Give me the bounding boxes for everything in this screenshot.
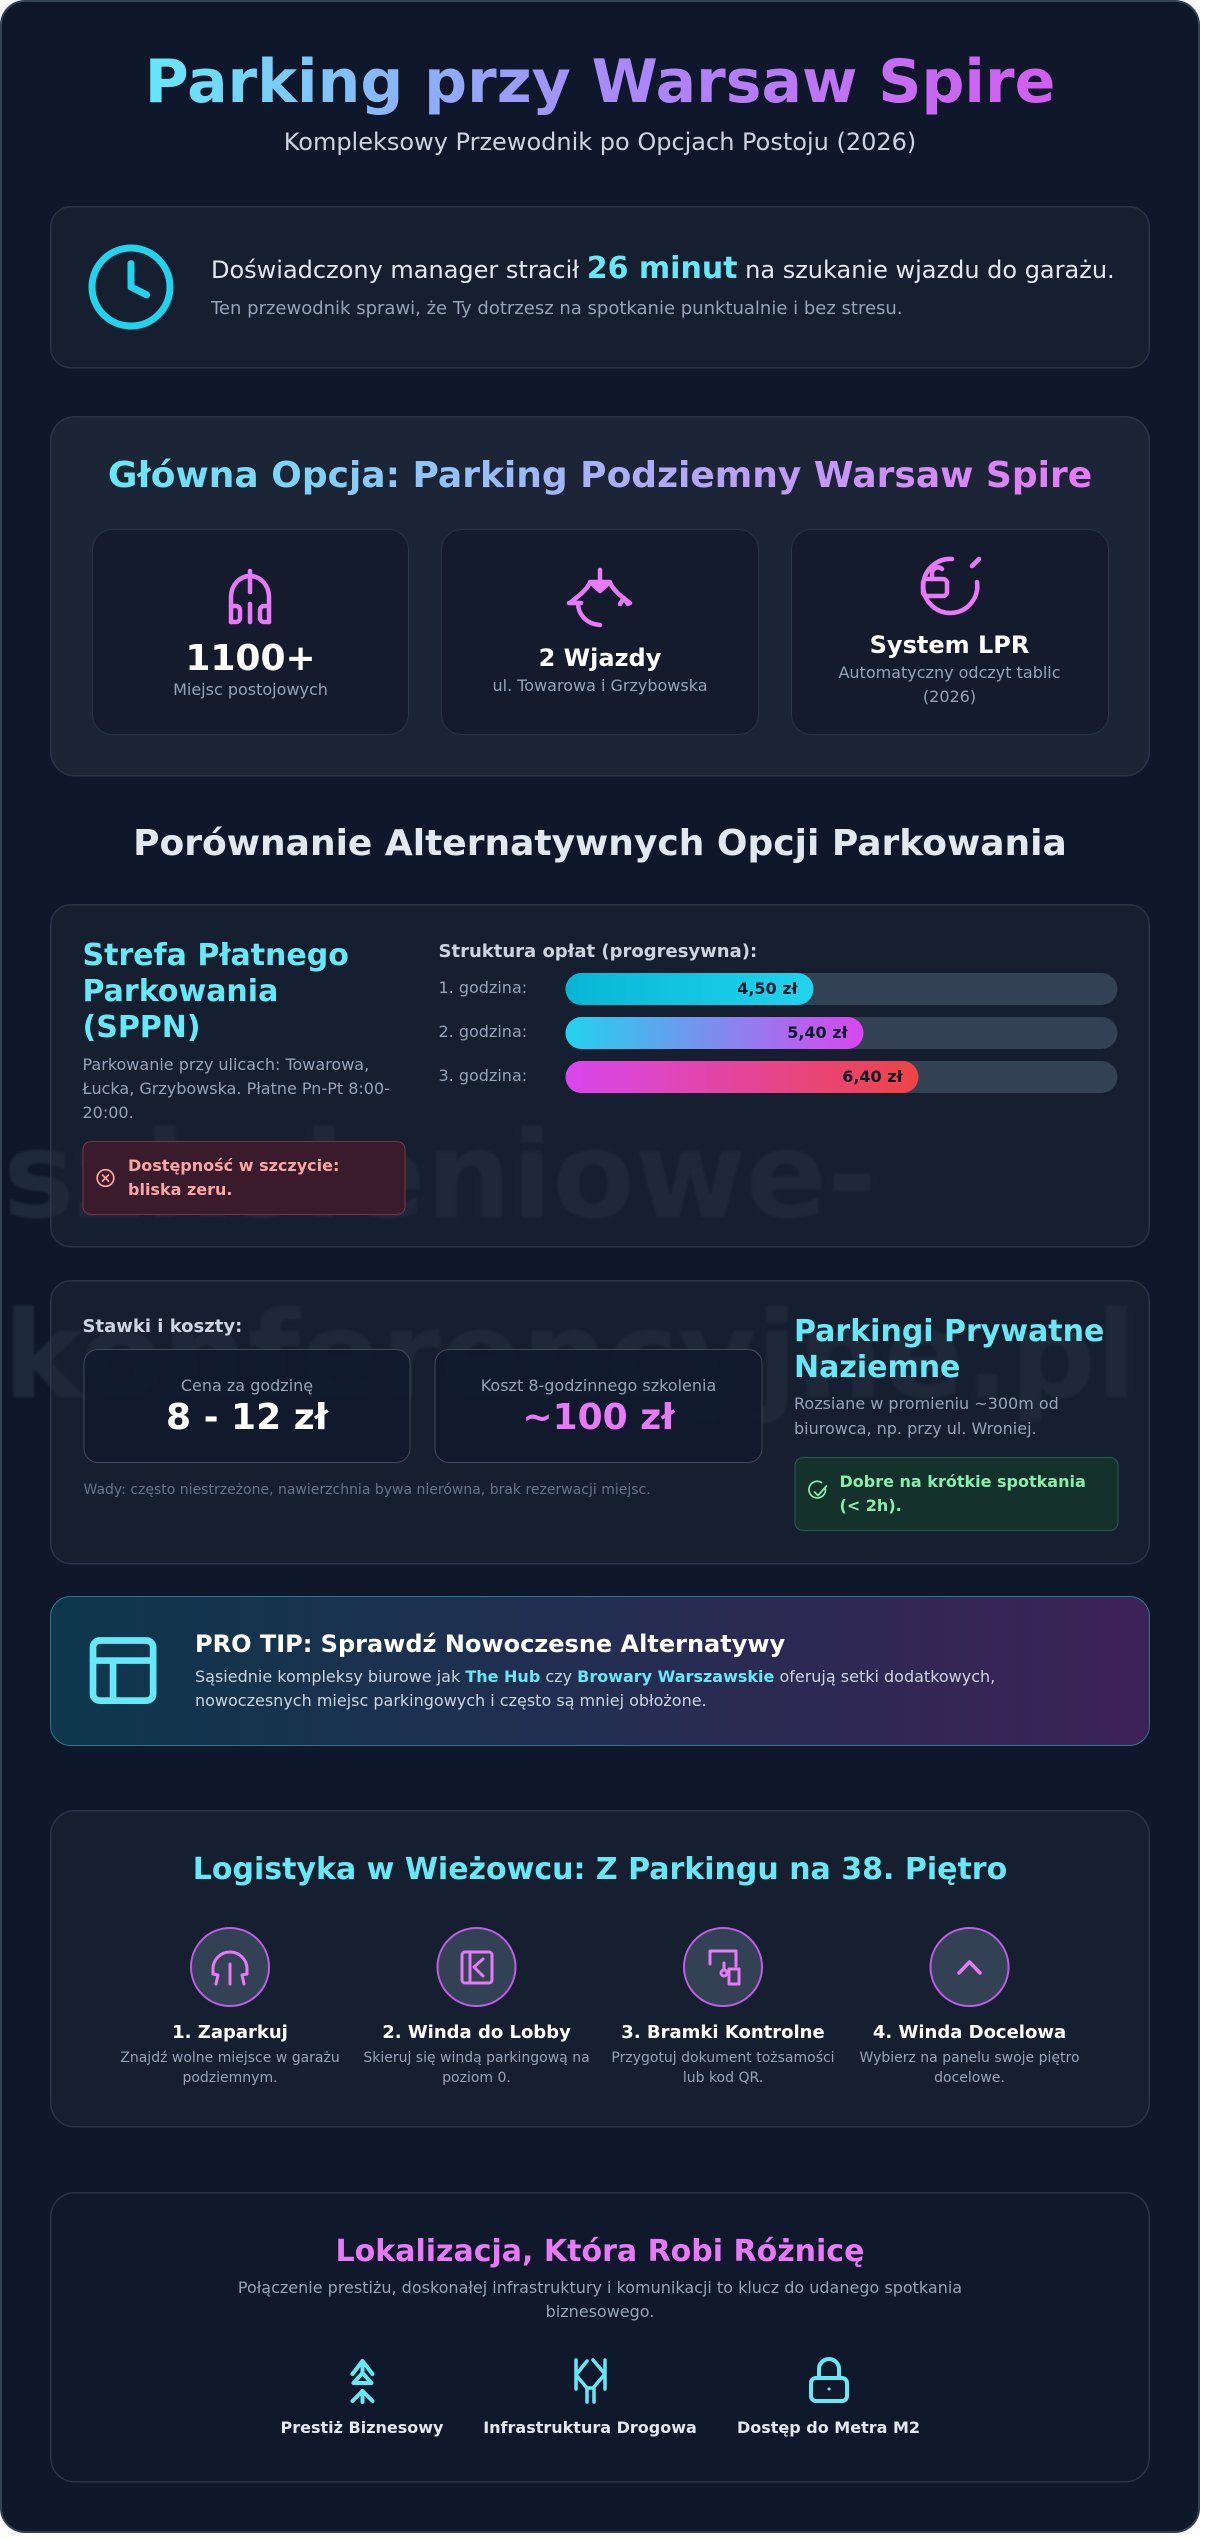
step 4: Wybierz na panelu swoje piętro	[859, 2050, 1080, 2066]
title: Parking przy Warsaw Spire	[145, 47, 1055, 117]
stat label: ul. Towarowa i Grzybowska	[492, 676, 708, 695]
step 4	[859, 1928, 1080, 2086]
icon: elevator	[438, 1928, 516, 2006]
icon: parking dome	[231, 571, 269, 622]
feature: prestige	[281, 2361, 444, 2437]
callout text: Dobre na krótkie spotkania	[840, 1472, 1086, 1491]
callout text	[128, 1156, 339, 1199]
zone title: Parkowania	[82, 974, 278, 1009]
zone title	[82, 938, 349, 1045]
icon: LPR camera	[923, 559, 979, 613]
icon: clock	[92, 248, 170, 326]
bar row: hour 3	[438, 1061, 1118, 1093]
feature: metro access	[737, 2359, 920, 2437]
rate card: training: ~100 zł	[522, 1397, 676, 1438]
bar row: hour 2: 2. godzina:	[438, 1022, 527, 1041]
step 2: poziom 0.	[442, 2070, 511, 2086]
watermark	[3, 1107, 1137, 1426]
location description	[238, 2278, 962, 2321]
private parking description: Rozsiane w promieniu ~300m od	[794, 1394, 1059, 1413]
bar row: hour 1: 4,50 zł	[737, 979, 799, 998]
stat label: Automatyczny odczyt tablic	[838, 663, 1061, 682]
hero statement: Doświadczony manager stracił 26 minut na szukanie wjazdu do garażu.	[211, 251, 1115, 286]
panel: hero intro	[51, 207, 1149, 368]
step 1: podziemnym.	[182, 2070, 278, 2086]
feature: metro access: Dostęp do Metra M2	[737, 2418, 920, 2437]
bar row: hour 1: 1. godzina:	[438, 978, 527, 997]
rate card: training: Koszt 8-godzinnego szkolenia	[481, 1376, 716, 1395]
icon: chevron up	[930, 1928, 1008, 2006]
callout text: Dostępność w szczycie:	[128, 1156, 339, 1175]
icon: check circle	[809, 1481, 826, 1498]
step 3: 3. Bramki Kontrolne	[621, 2022, 825, 2043]
private parking title: Naziemne	[794, 1350, 960, 1385]
icon: layout	[93, 1641, 153, 1701]
location description: Połączenie prestiżu, doskonałej infrastruktury i komunikacji to klucz do udanego spotkania	[238, 2278, 962, 2297]
zone description: Łucka, Grzybowska. Płatne Pn-Pt 8:00-	[82, 1079, 390, 1098]
rate card: hourly	[84, 1350, 410, 1462]
callout: availability	[83, 1142, 405, 1214]
step 4: docelowe.	[934, 2070, 1005, 2086]
rate card: training	[435, 1350, 762, 1462]
private parking title	[794, 1314, 1104, 1385]
stat card: LPR system	[792, 530, 1108, 734]
location description: biznesowego.	[546, 2302, 654, 2321]
tip text: nowoczesnych miejsc parkingowych i często są mniej obłożone.	[195, 1691, 707, 1710]
hero subtext: Ten przewodnik sprawi, że Ty dotrzesz na spotkanie punktualnie i bez stresu.	[210, 298, 903, 319]
private parking description	[794, 1394, 1059, 1438]
subtitle: Kompleksowy Przewodnik po Opcjach Postoju (2026)	[284, 128, 916, 156]
step 3: lub kod QR.	[683, 2070, 763, 2086]
icon: park	[191, 1928, 269, 2006]
step 2: Skieruj się windą parkingową na	[363, 2050, 590, 2066]
rate card: hourly: 8 - 12 zł	[166, 1397, 330, 1438]
comparison heading: Porównanie Alternatywnych Opcji Parkowania	[133, 823, 1067, 864]
icon: x circle	[97, 1170, 114, 1186]
bar row: hour 2: 5,40 zł	[787, 1023, 849, 1042]
zone title: (SPPN)	[82, 1010, 201, 1045]
drawbacks note: Wady: często niestrzeżone, nawierzchnia bywa nierówna, brak rezerwacji miejsc.	[84, 1482, 651, 1498]
stat card: entrances	[442, 530, 758, 734]
bar row: hour 2	[438, 1017, 1118, 1049]
watermark: konferencyjne.pl	[3, 1287, 1137, 1426]
step 3	[611, 1928, 835, 2086]
feature: road infrastructure	[483, 2360, 697, 2437]
step 3: Przygotuj dokument tożsamości	[611, 2050, 835, 2066]
step 2: 2. Winda do Lobby	[382, 2022, 571, 2043]
tip title: PRO TIP: Sprawdź Nowoczesne Alternatywy	[195, 1630, 786, 1658]
panel: location	[51, 2193, 1149, 2482]
tip text: Sąsiednie kompleksy biurowe jak The Hub czy Browary Warszawskie oferują setki dodatkowych,	[195, 1667, 995, 1686]
logistics heading: Logistyka w Wieżowcu: Z Parkingu na 38. Piętro	[193, 1852, 1007, 1887]
bar row: hour 3: 6,40 zł	[842, 1067, 904, 1086]
icon: road	[576, 2360, 605, 2402]
callout text	[840, 1472, 1086, 1515]
private parking title: Parkingi Prywatne	[794, 1314, 1104, 1349]
icon: gates	[684, 1928, 762, 2006]
zone description: Parkowanie przy ulicach: Towarowa,	[82, 1055, 369, 1074]
step 1: 1. Zaparkuj	[172, 2022, 288, 2043]
feature: prestige: Prestiż Biznesowy	[281, 2418, 444, 2437]
stat value: 2 Wjazdy	[539, 644, 662, 672]
stat value: System LPR	[870, 631, 1029, 659]
panel: logistics	[51, 1811, 1149, 2127]
stat card: spaces	[92, 530, 408, 734]
icon: arrows up	[352, 2361, 372, 2402]
icon: lock	[811, 2359, 847, 2401]
location heading: Lokalizacja, Która Robi Różnicę	[336, 2234, 864, 2269]
zone description: 20:00.	[82, 1103, 134, 1122]
bar row: hour 3: 3. godzina:	[438, 1066, 527, 1085]
private parking description: biurowca, np. przy ul. Wroniej.	[794, 1419, 1037, 1438]
stat value: 1100+	[185, 638, 316, 679]
step 2	[363, 1928, 590, 2086]
tip text	[195, 1667, 995, 1710]
rate card: hourly: Cena za godzinę	[181, 1376, 313, 1395]
stat label: Miejsc postojowych	[173, 680, 328, 699]
step 1: Znajdź wolne miejsce w garażu	[120, 2050, 340, 2066]
callout text: bliska zeru.	[128, 1180, 232, 1199]
feature: road infrastructure: Infrastruktura Drogowa	[483, 2418, 697, 2437]
rates heading: Stawki i koszty:	[82, 1316, 242, 1337]
callout text: (< 2h).	[840, 1496, 902, 1515]
zone title: Strefa Płatnego	[82, 938, 349, 973]
step 4: 4. Winda Docelowa	[873, 2022, 1066, 2043]
private parking content	[82, 1314, 1118, 1530]
panel: pro tip	[50, 1596, 1150, 1746]
icon: entrances	[569, 570, 630, 625]
panel: main option	[51, 417, 1149, 776]
main option heading: Główna Opcja: Parking Podziemny Warsaw Spire	[108, 455, 1092, 496]
stat card: LPR system: (2026)	[923, 687, 976, 706]
bar row: hour 1	[438, 973, 1118, 1005]
zone description	[82, 1055, 390, 1122]
watermark: szkoleniowe-	[3, 1107, 877, 1246]
bar chart: fees	[438, 973, 1118, 1093]
callout: short meetings	[795, 1458, 1118, 1530]
zone content	[82, 938, 1118, 1214]
panel: private surface parking	[51, 1281, 1149, 1564]
step 1	[120, 1928, 340, 2086]
fee heading: Struktura opłat (progresywna):	[438, 941, 757, 962]
panel: paid parking zone	[51, 905, 1149, 1247]
